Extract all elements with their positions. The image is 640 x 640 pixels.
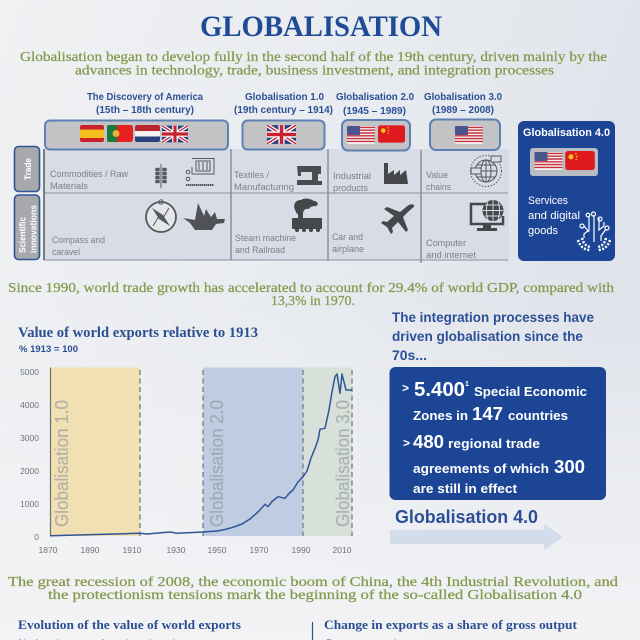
chart: value of world exports relative to 1913 <box>18 325 353 555</box>
cell text: innovations row: Computer <box>426 238 466 249</box>
section: change in exports: Change in exports as a share of gross output <box>324 617 578 632</box>
divider <box>312 622 314 640</box>
cell text: innovations row: and internet <box>426 250 476 261</box>
special economic zones: Zones in <box>413 408 468 423</box>
column headings: (1989 – 2008) <box>432 105 494 116</box>
x axis: 1990 <box>292 545 311 555</box>
text: great recession: the protectionism tensions mark the beginning of the so-called Globalisation 4.0 <box>48 588 582 603</box>
intro text: Globalisation began to develop fully in the second half of the 19th century, driven mainly by the <box>20 50 607 65</box>
services text: Services <box>528 195 568 207</box>
cell text: innovations row: Steam machine <box>235 233 296 244</box>
cell text: innovations row <box>52 232 476 261</box>
column headings: (1945 – 1989) <box>343 106 406 117</box>
y axis: 1000 <box>20 499 39 509</box>
heading: integration processes: The integration processes have <box>392 309 594 325</box>
icon: caravel <box>183 203 225 230</box>
icon: computer with globe <box>471 200 504 231</box>
icon: sewing machine <box>297 166 322 185</box>
panel: globalisation 4.0: Globalisation 4.0 <box>523 127 610 139</box>
text: great recession <box>8 575 618 603</box>
x axis: 1950 <box>208 545 227 555</box>
regional trade agreements: regional trade <box>448 436 540 451</box>
special economic zones <box>402 379 587 424</box>
y axis: 2000 <box>20 466 39 476</box>
icon: compass <box>146 200 176 232</box>
column headings: Globalisation 1.0 <box>245 92 324 103</box>
icon: cargo container <box>186 158 214 185</box>
flags: globalisation 2.0 <box>342 120 410 150</box>
row label: scientific innovations: innovations <box>28 205 38 253</box>
flag: globalisation 1.0 <box>242 120 324 150</box>
services text <box>528 195 580 237</box>
regional trade agreements: 480 <box>413 432 444 452</box>
x axis: 2010 <box>333 545 352 555</box>
panel: globalisation 4.0 <box>518 121 615 261</box>
x axis: 1890 <box>81 545 100 555</box>
flags: discovery of America <box>45 120 228 150</box>
special economic zones: 5.400 <box>414 379 465 401</box>
column headings: (19th century – 1914) <box>234 105 333 116</box>
cell text: trade row: Commodities / Raw <box>50 169 128 180</box>
regional trade agreements: are still in effect <box>413 481 518 496</box>
band labels <box>52 400 353 527</box>
text: world trade growth <box>8 281 614 309</box>
intro text: advances in technology, trade, business investment, and integration processes <box>75 64 554 78</box>
services text: and digital <box>528 210 580 222</box>
intro text <box>20 50 607 78</box>
cell text: trade row: Value <box>426 170 448 181</box>
band labels: Globalisation 1.0 <box>52 400 72 527</box>
cell text: trade row: products <box>333 183 368 194</box>
x axis: 1970 <box>250 545 269 555</box>
special economic zones: Special Economic <box>474 384 587 399</box>
regional trade agreements: 300 <box>554 457 585 477</box>
regional trade agreements: agreements of which <box>413 461 549 476</box>
band labels: Globalisation 3.0 <box>333 400 353 527</box>
services text: goods <box>528 225 558 237</box>
chart unit: % 1913 = 100 <box>19 344 78 354</box>
icon: factory <box>384 163 408 184</box>
arrow <box>390 524 563 550</box>
text: great recession: The great recession of 2008, the economic boom of China, the 4th Industrial Revolution, and <box>8 575 618 590</box>
row label: scientific innovations: Scientific <box>18 217 28 253</box>
chart title: Value of world exports relative to 1913 <box>18 325 258 341</box>
column headings <box>87 92 502 117</box>
heading: integration processes: 70s... <box>392 347 427 363</box>
column headings: (15th – 18th century) <box>96 105 194 116</box>
cell text: innovations row: Compass and <box>52 235 105 246</box>
cell text: trade row: Textiles / <box>234 170 269 181</box>
y axis: 5000 <box>20 367 39 377</box>
special economic zones: 147 <box>472 404 503 424</box>
y axis: 0 <box>34 532 39 542</box>
icon: steam train <box>292 198 322 232</box>
y axis: 4000 <box>20 400 39 410</box>
row label: scientific innovations <box>14 195 40 260</box>
heading: integration processes: driven globalisation since the <box>392 328 583 344</box>
y axis: 3000 <box>20 433 39 443</box>
icon: digital circuit <box>578 212 610 250</box>
icon: wheat <box>156 164 166 188</box>
section: evolution of world exports: Evolution of the value of world exports <box>18 617 241 632</box>
row label: trade <box>14 146 40 192</box>
label: globalisation 4.0: Globalisation 4.0 <box>395 507 538 527</box>
section: change in exports <box>324 617 578 640</box>
cell text: trade row: chains <box>426 182 451 193</box>
column headings: Globalisation 3.0 <box>424 92 502 103</box>
text: world trade growth: Since 1990, world trade growth has accelerated to account for 29.4% of world GDP, compared with <box>8 281 614 296</box>
cell text: trade row: Manufacturing <box>234 182 294 193</box>
era bands <box>50 368 352 536</box>
cell text: trade row: Industrial <box>333 171 371 182</box>
band labels: Globalisation 2.0 <box>207 400 227 527</box>
y axis <box>20 367 39 542</box>
cell text: trade row <box>50 169 451 194</box>
heading: integration processes <box>392 309 594 363</box>
x axis: 1930 <box>167 545 186 555</box>
text: world trade growth: 13,3% in 1970. <box>271 294 355 309</box>
cell text: innovations row: Car and <box>332 232 363 243</box>
cell text: innovations row: and Railroad <box>235 245 285 256</box>
regional trade agreements: > <box>403 436 410 450</box>
row label: trade: Trade <box>23 158 33 180</box>
cell text: trade row: Materials <box>50 181 88 192</box>
x axis <box>39 545 352 555</box>
cell text: innovations row: caravel <box>52 247 80 258</box>
icon: globe with tags <box>470 156 502 186</box>
title: GLOBALISATION <box>200 10 442 43</box>
flags: USA and China <box>530 148 598 176</box>
panel: integration figures <box>390 367 606 500</box>
regional trade agreements <box>403 432 585 496</box>
icon: airplane <box>381 204 414 234</box>
section: evolution of world exports <box>18 617 241 640</box>
column headings: The Discovery of America <box>87 92 203 103</box>
export line <box>50 374 352 536</box>
column headings: Globalisation 2.0 <box>336 92 414 103</box>
special economic zones: > <box>402 381 409 395</box>
x axis: 1910 <box>123 545 142 555</box>
special economic zones: countries <box>508 408 568 423</box>
flag: globalisation 3.0 <box>430 120 500 150</box>
table: eras by trade and innovations <box>14 120 509 263</box>
x axis: 1870 <box>39 545 58 555</box>
cell text: innovations row: airplane <box>332 244 364 255</box>
special economic zones: 1 <box>465 381 469 388</box>
